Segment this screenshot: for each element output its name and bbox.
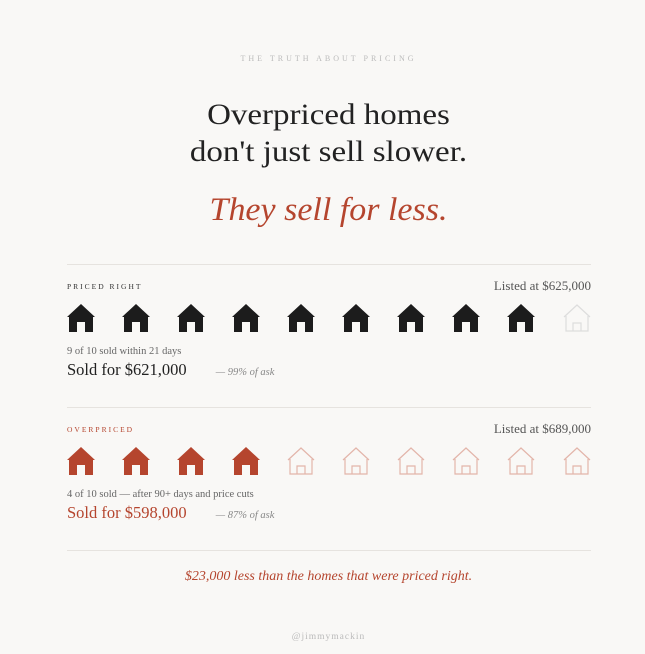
title — [190, 98, 467, 168]
sold price: Sold for $598,000 — 87% of ask — [67, 503, 274, 522]
title: don't just sell slower. — [190, 135, 467, 168]
title: Overpriced homes — [207, 98, 450, 131]
credit: @jimmymackin — [292, 632, 365, 642]
panel: priced right — [67, 278, 591, 379]
label: PRICED RIGHT — [67, 282, 142, 291]
eyebrow: THE TRUTH ABOUT PRICING — [240, 54, 417, 63]
house icons — [67, 304, 590, 332]
label: OVERPRICED — [67, 425, 134, 434]
house icons — [67, 447, 590, 475]
subtitle: They sell for less. — [210, 192, 447, 228]
panel: overpriced — [67, 421, 591, 522]
sold note: 9 of 10 sold within 21 days — [67, 346, 181, 357]
conclusion: $23,000 less than the homes that were priced right. — [185, 569, 472, 584]
sold price: Sold for $621,000 — 99% of ask — [67, 360, 274, 379]
list price: Listed at $625,000 — [494, 278, 591, 293]
list price: Listed at $689,000 — [494, 421, 591, 436]
sold note: 4 of 10 sold — after 90+ days and price cuts — [67, 489, 254, 500]
